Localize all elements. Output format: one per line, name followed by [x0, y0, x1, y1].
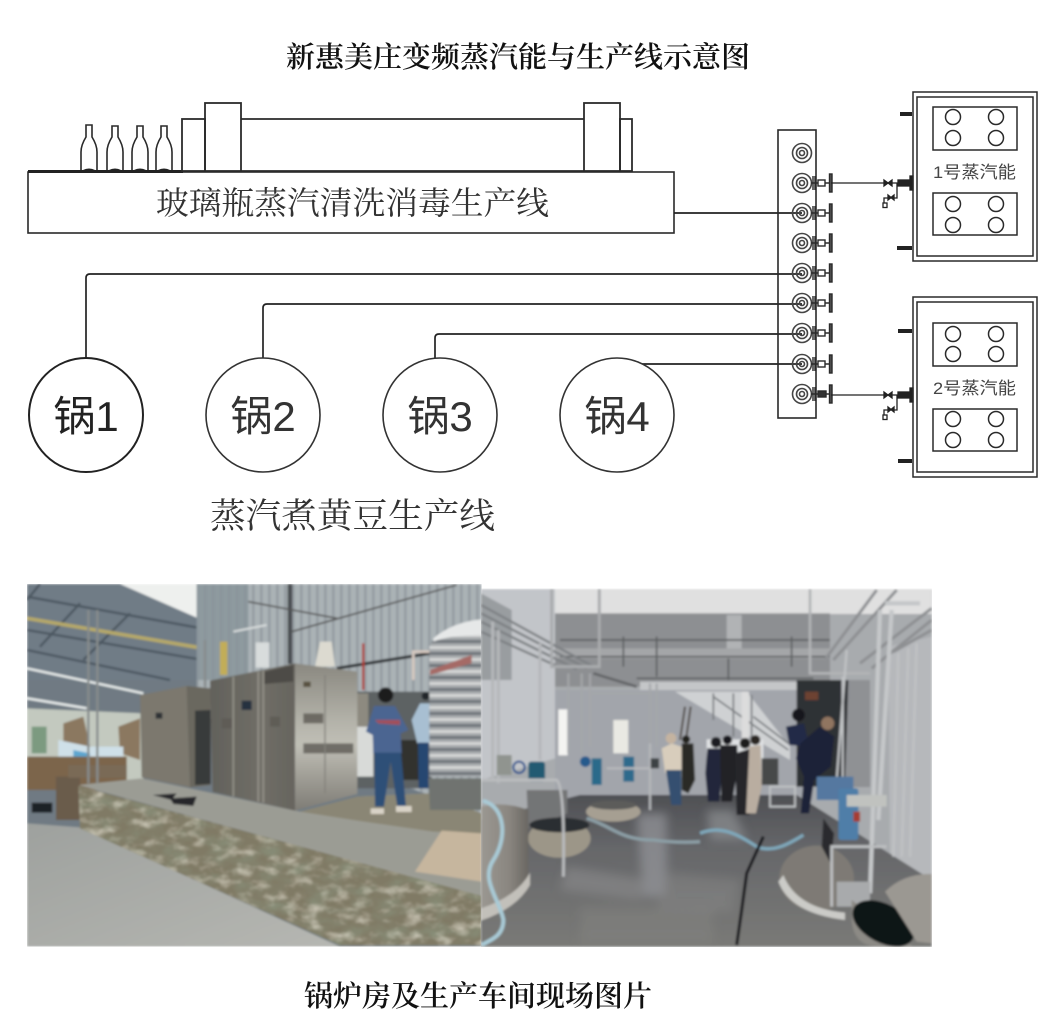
photo: boiler room [27, 584, 482, 947]
manifold valves [811, 174, 832, 403]
soybean boiler 2 [206, 358, 320, 472]
pipe: manifold to steam unit 2 [831, 388, 913, 420]
manifold ports [792, 144, 812, 404]
right wall [888, 637, 932, 877]
soybean boiler 4: 锅4 [584, 393, 650, 440]
machine housing [182, 103, 632, 171]
soybean boiler 1: 锅1 [53, 393, 119, 440]
deck [78, 778, 482, 897]
poles [88, 610, 205, 783]
stacked blocks [56, 777, 80, 820]
left wall [481, 589, 555, 780]
cables on deck [153, 793, 197, 806]
left tank [481, 804, 528, 908]
back boiler [139, 686, 190, 787]
person in blue jacket [366, 706, 408, 753]
distant yard [27, 708, 143, 783]
title: 新惠美庄变频蒸汽能与生产线示意图 [286, 40, 750, 74]
front boiler [210, 663, 295, 811]
left vats [527, 790, 567, 828]
soybean boiler 4 [560, 358, 674, 472]
bucket [852, 900, 913, 947]
floor [27, 823, 340, 947]
floor [481, 795, 932, 947]
back wall [640, 690, 797, 692]
hoses [482, 801, 503, 945]
right dark zone [795, 678, 850, 788]
connecting steam pipes [86, 213, 802, 365]
ceiling [481, 589, 932, 614]
soybean boiler 1 [29, 358, 143, 472]
steam unit 1 [897, 92, 1037, 261]
steam manifold [778, 130, 832, 418]
line body box [28, 172, 674, 233]
soybean line label: 蒸汽煮黄豆生产线 [210, 497, 495, 536]
right vat [779, 846, 854, 911]
soybean boiler 2: 锅2 [230, 393, 296, 440]
staircase [675, 692, 790, 760]
line label: 玻璃瓶蒸汽清洗消毒生产线 [156, 185, 549, 221]
photo: production workshop [481, 589, 932, 956]
pipe: manifold to steam unit 1 [831, 176, 913, 208]
floor reflections [562, 806, 748, 916]
caption: 锅炉房及生产车间现场图片 [304, 980, 652, 1013]
left overhead pipes [481, 589, 657, 783]
roof [27, 584, 200, 680]
equipment behind [357, 692, 432, 788]
water tank [429, 619, 482, 777]
steam unit 2 [898, 297, 1037, 477]
soybean boiler 3 [383, 358, 497, 472]
cardboard [415, 831, 482, 882]
second person [412, 703, 430, 743]
unit 1 label: 1号蒸汽能 [933, 163, 1016, 182]
thick conveyor edge [28, 170, 183, 173]
unit 2 label: 2号蒸汽能 [933, 379, 1016, 398]
glass bottles [81, 125, 172, 170]
right overhead pipes [810, 589, 932, 893]
workshop people [662, 709, 834, 815]
tank stand [428, 778, 482, 810]
soybean boiler 3: 锅3 [407, 393, 473, 440]
valves and fittings [497, 743, 887, 840]
floor cable [737, 837, 763, 945]
diagram: glass bottle steam washing line [28, 103, 674, 233]
platform face [78, 786, 482, 945]
corrugated wall [197, 584, 482, 813]
